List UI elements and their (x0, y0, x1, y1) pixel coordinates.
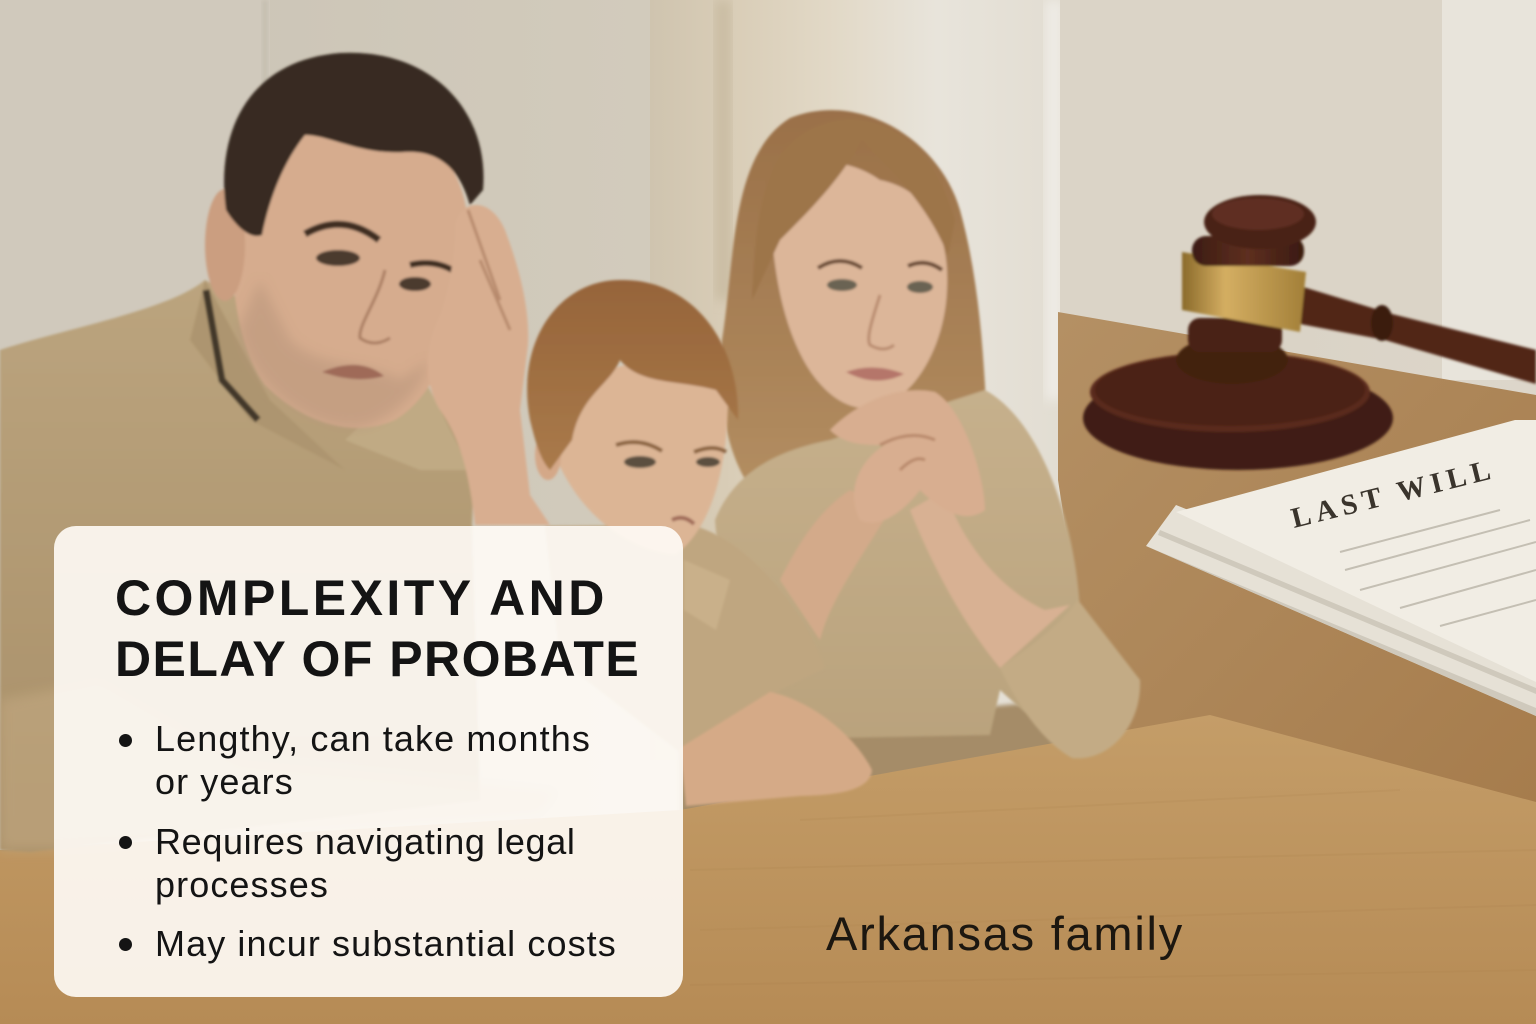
shadow behind people above the table (680, 700, 1120, 815)
heading: DELAY OF PROBATE (115, 631, 640, 687)
gavel and sound block (1083, 195, 1536, 470)
heading: COMPLEXITY AND (115, 570, 608, 626)
last will papers (1146, 420, 1536, 716)
heading (115, 570, 640, 687)
man (0, 53, 550, 852)
bullet list (119, 718, 617, 964)
bullet list: May incur substantial costs (155, 923, 617, 964)
woman (715, 110, 1140, 758)
boy (527, 280, 872, 806)
caption: Arkansas family (826, 907, 1184, 960)
text card (54, 526, 683, 997)
bullet list: processes (155, 864, 329, 905)
bullet list: or years (155, 761, 294, 802)
back desk (1058, 312, 1536, 815)
last will papers: LAST WILL (1288, 453, 1499, 535)
bullet list: Lengthy, can take months (155, 718, 591, 759)
bullet list: Requires navigating legal (155, 821, 576, 862)
front table (0, 715, 1536, 1024)
soft arm visible through card (0, 680, 560, 850)
